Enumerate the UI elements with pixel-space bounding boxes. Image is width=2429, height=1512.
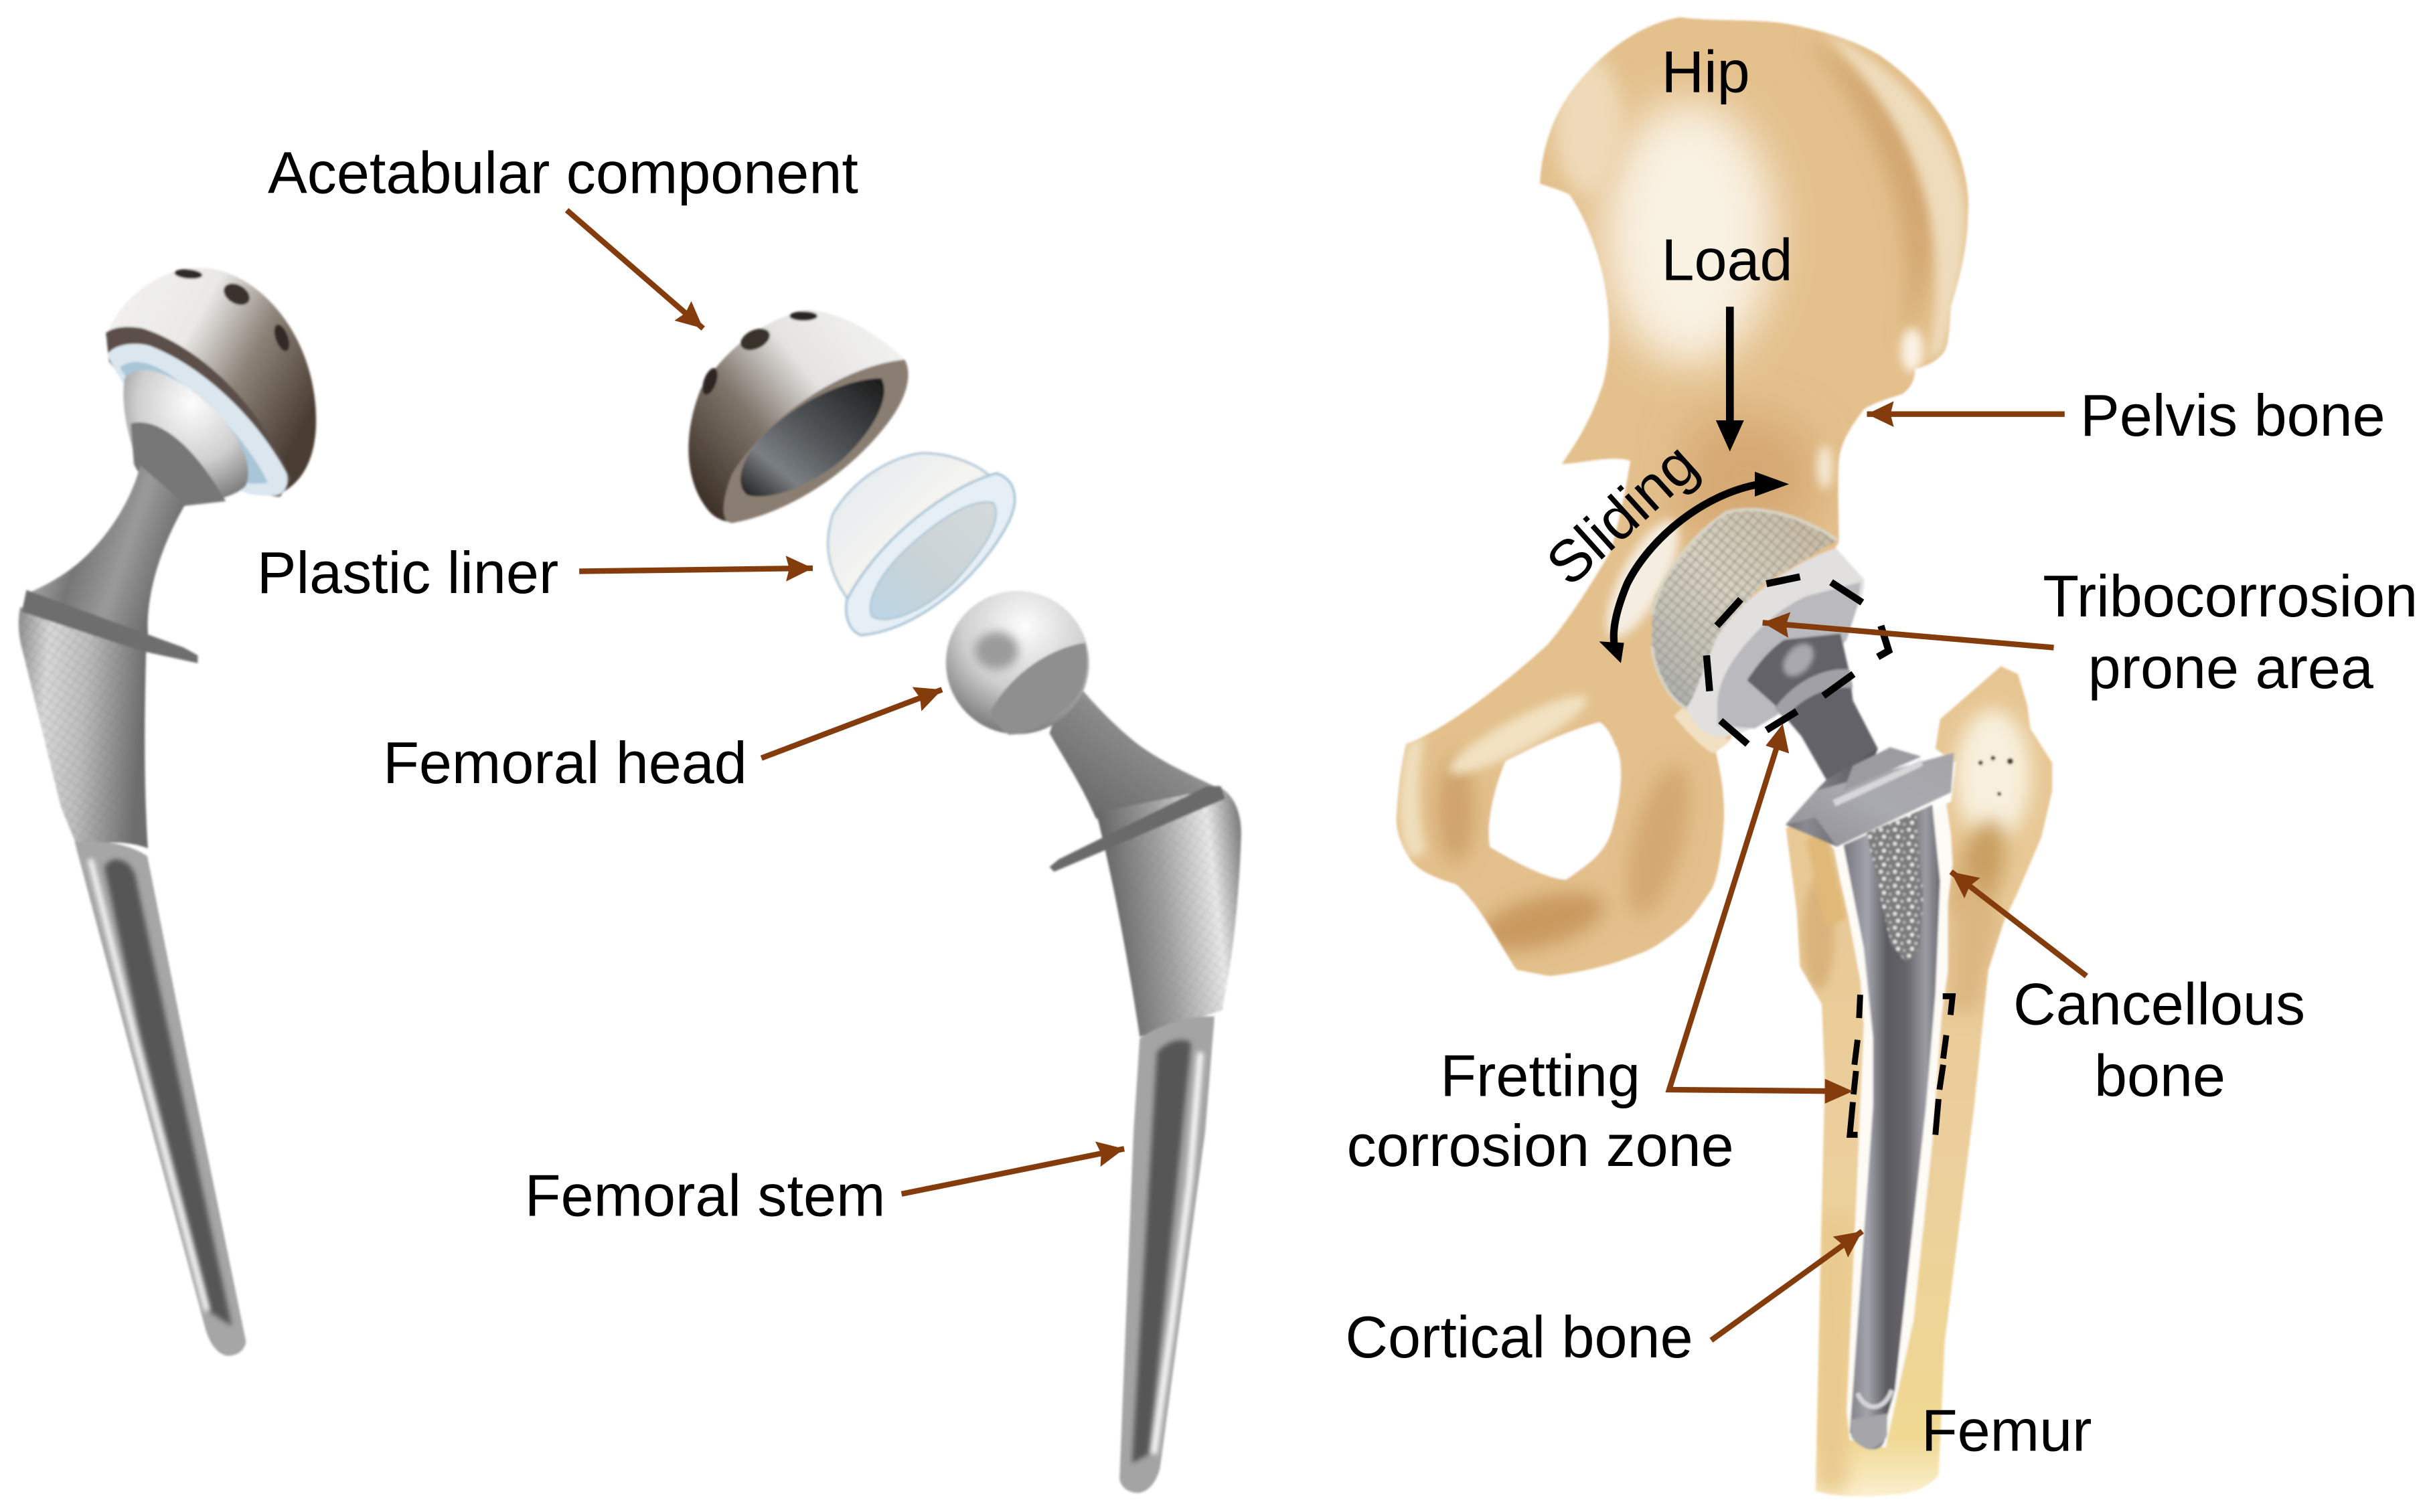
label: Femoral stem: Femoral stem [525,1162,885,1228]
acetabular mesh shell [1652,509,1837,708]
femoral head and taper, assembled [123,370,248,505]
label: Cancellous bone [2013,971,2305,1108]
label: Cancellous bone: bone [2094,1042,2225,1108]
label: Tribocorrosion prone area: prone area [2088,635,2374,701]
porous coating [1867,813,1923,962]
distal stem, exploded [1119,1016,1214,1493]
arrow: Sliding [1599,472,1789,663]
label: Cancellous bone: Cancellous [2013,971,2305,1037]
label: Load: Load [1661,227,1793,293]
label: Fretting corrosion zone [1347,1042,1734,1179]
illustration: assembled hip implant [19,268,316,1356]
label: Sliding: Sliding [1534,430,1710,598]
collar and taper, implanted [1747,640,1954,847]
neck and collar, assembled [28,465,185,646]
label: Tribocorrosion prone area: Tribocorrosion [2043,563,2418,629]
label: Cortical bone: Cortical bone [1345,1304,1693,1370]
dashed circle: tribocorrosion zone [1707,577,1889,744]
dashed outline: fretting corrosion zone, right [1936,996,1952,1135]
label: Femoral head: Femoral head [383,730,747,796]
arrow: Plastic liner [579,568,813,572]
arrows: Fretting corrosion zone [1669,724,1853,1104]
arrow: Load [1716,307,1744,451]
femoral stem, implanted [1844,805,1940,1450]
plastic liner [828,453,1015,635]
arrow: Cancellous bone [1951,871,2086,976]
label: Pelvis bone: Pelvis bone [2080,382,2385,448]
medullary canal [1834,803,1952,1448]
label: Plastic liner: Plastic liner [257,539,558,606]
acetabular cup, assembled [106,268,316,497]
label: Femur: Femur [1922,1398,2092,1464]
arrow: Acetabular component [567,210,703,329]
illustration: exploded hip implant [688,310,1241,1493]
arrow: Cortical bone [1711,1232,1862,1340]
fin, assembled [22,590,198,663]
fin, exploded [1049,786,1225,871]
label: Fretting corrosion zone: corrosion zone [1347,1112,1734,1179]
proximal body, exploded [1096,788,1241,1037]
acetabular cup, exploded [688,310,909,523]
label: Tribocorrosion prone area [2043,563,2418,701]
label: Hip: Hip [1661,38,1750,104]
arrow: Tribocorrosion [1763,622,2054,648]
obturator foramen [1489,722,1621,879]
pelvis bone [1397,17,1968,976]
illustration: hip joint cross-section [1397,17,2052,1497]
dashed outline: fretting corrosion zone, left [1850,995,1860,1135]
femur [1786,666,2052,1497]
arrow: Pelvis bone [1867,413,2065,415]
label: Fretting corrosion zone: Fretting [1440,1042,1640,1108]
liner and femoral head, implanted [1687,548,1878,780]
arrow: Femoral head [761,689,942,758]
femoral head, exploded [946,591,1089,735]
arrow: Femoral stem [902,1149,1124,1194]
proximal body, assembled [19,607,148,849]
label: Acetabular component: Acetabular component [268,139,858,205]
femoral neck, exploded [1049,689,1224,819]
distal stem, assembled [75,841,246,1356]
